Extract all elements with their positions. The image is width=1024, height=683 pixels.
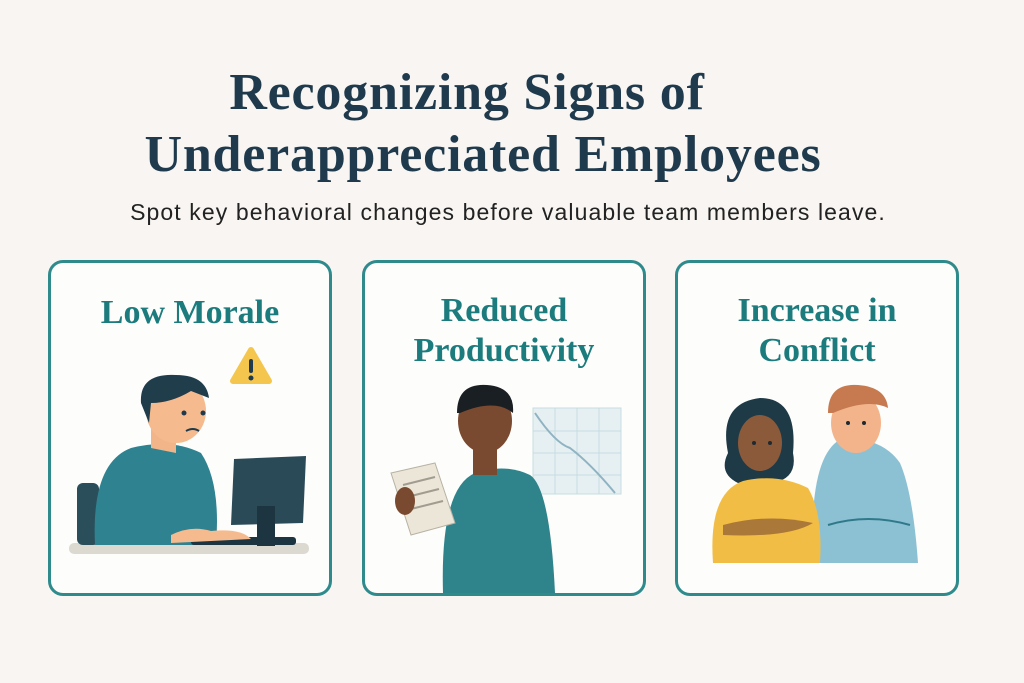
illustration: man at computer: [69, 347, 309, 554]
illustration: two coworkers arms crossed: [712, 384, 918, 563]
heading: increase in conflict: Conflict: [758, 332, 876, 369]
illustration: man with document and chart: [390, 384, 622, 593]
heading: reduced productivity: [414, 292, 594, 369]
title: Recognizing Signs of: [229, 64, 705, 121]
title: Underappreciated Employees: [144, 126, 822, 183]
panel: reduced productivity: [362, 260, 646, 596]
heading: low morale: Low Morale: [101, 294, 279, 331]
heading: reduced productivity: Reduced: [441, 292, 567, 329]
title: [144, 64, 822, 183]
heading: increase in conflict: Increase in: [738, 292, 896, 329]
subtitle: Spot key behavioral changes before valuable team members leave.: [130, 199, 886, 225]
panel: increase in conflict: [675, 260, 959, 596]
heading: reduced productivity: Productivity: [414, 332, 594, 369]
heading: increase in conflict: [738, 292, 896, 369]
panel: low morale: [48, 260, 332, 596]
